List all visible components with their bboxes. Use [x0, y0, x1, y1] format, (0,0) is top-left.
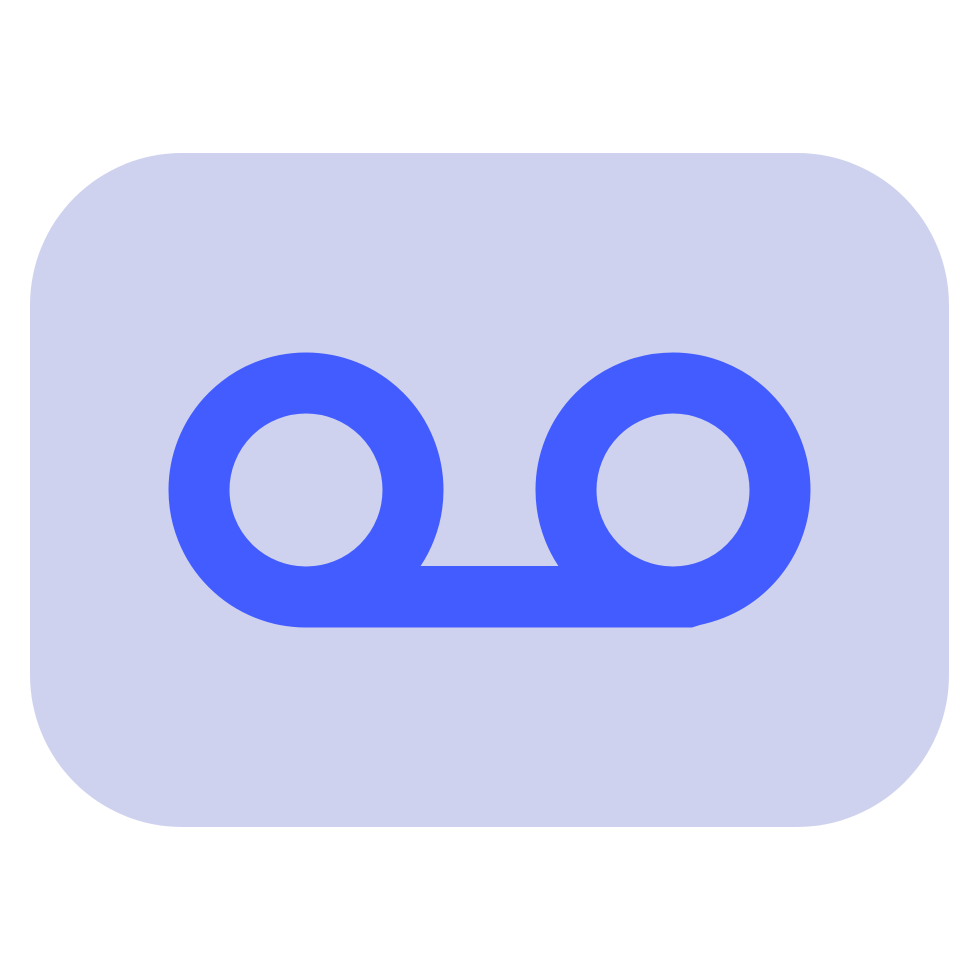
rounded rectangle background: [30, 153, 949, 827]
voicemail glyph: [199, 383, 780, 628]
